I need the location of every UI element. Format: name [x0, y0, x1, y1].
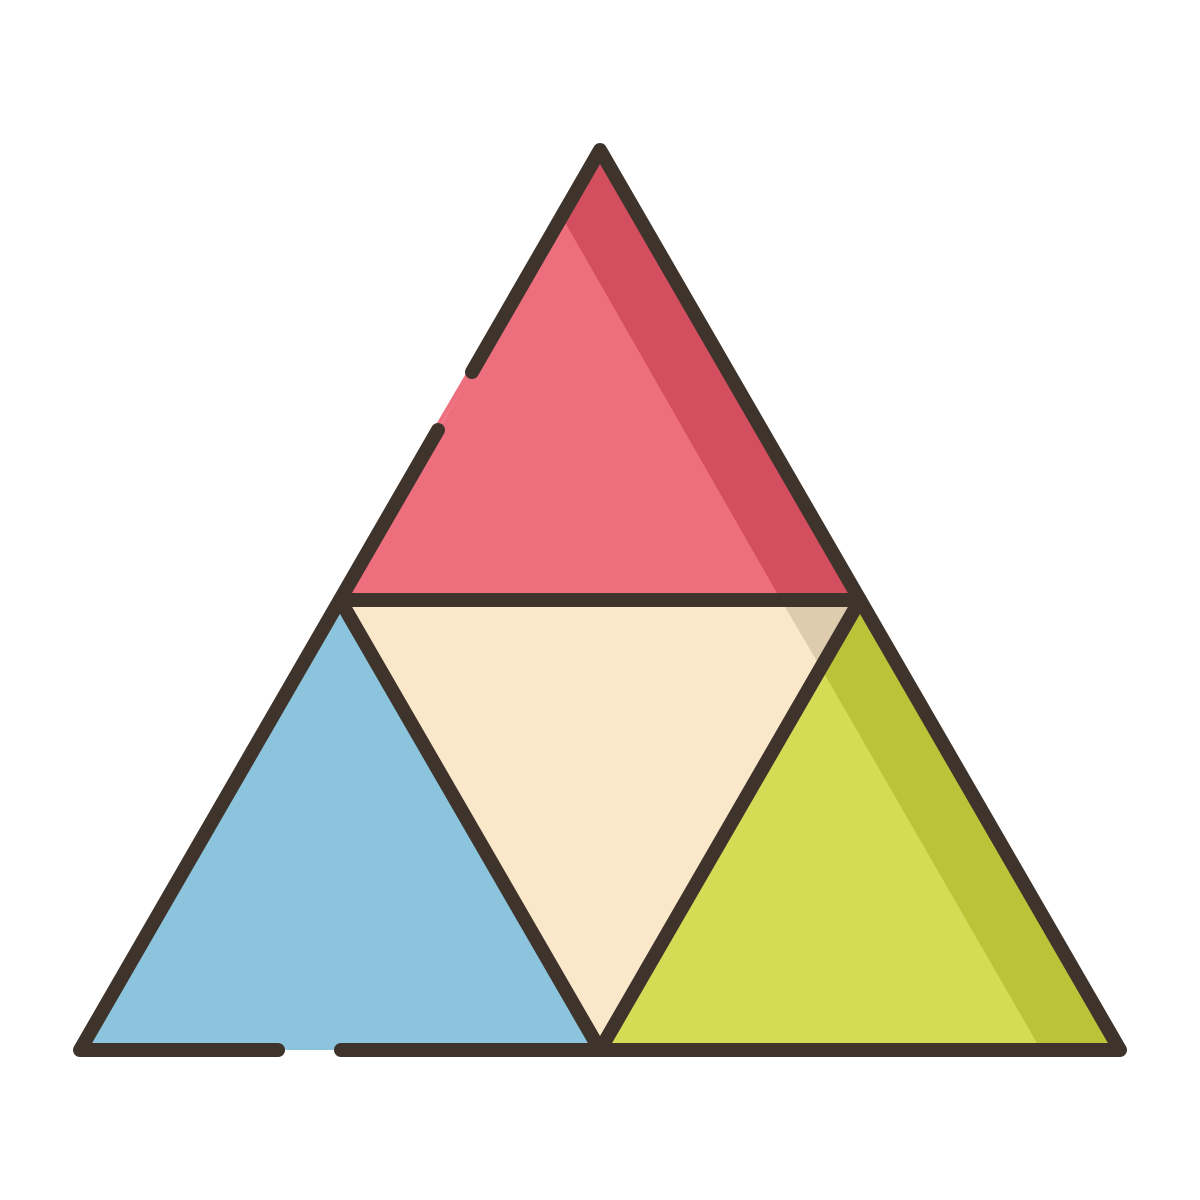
- left triangle: blue: [80, 600, 600, 1050]
- outline: [80, 150, 1120, 1050]
- gap in blue triangle baseline: [280, 1050, 340, 1058]
- top triangle: red: [340, 150, 860, 600]
- right triangle: green: [600, 600, 1120, 1050]
- gap in red triangle edge: [434, 370, 472, 430]
- centre triangle: cream: [340, 600, 860, 1050]
